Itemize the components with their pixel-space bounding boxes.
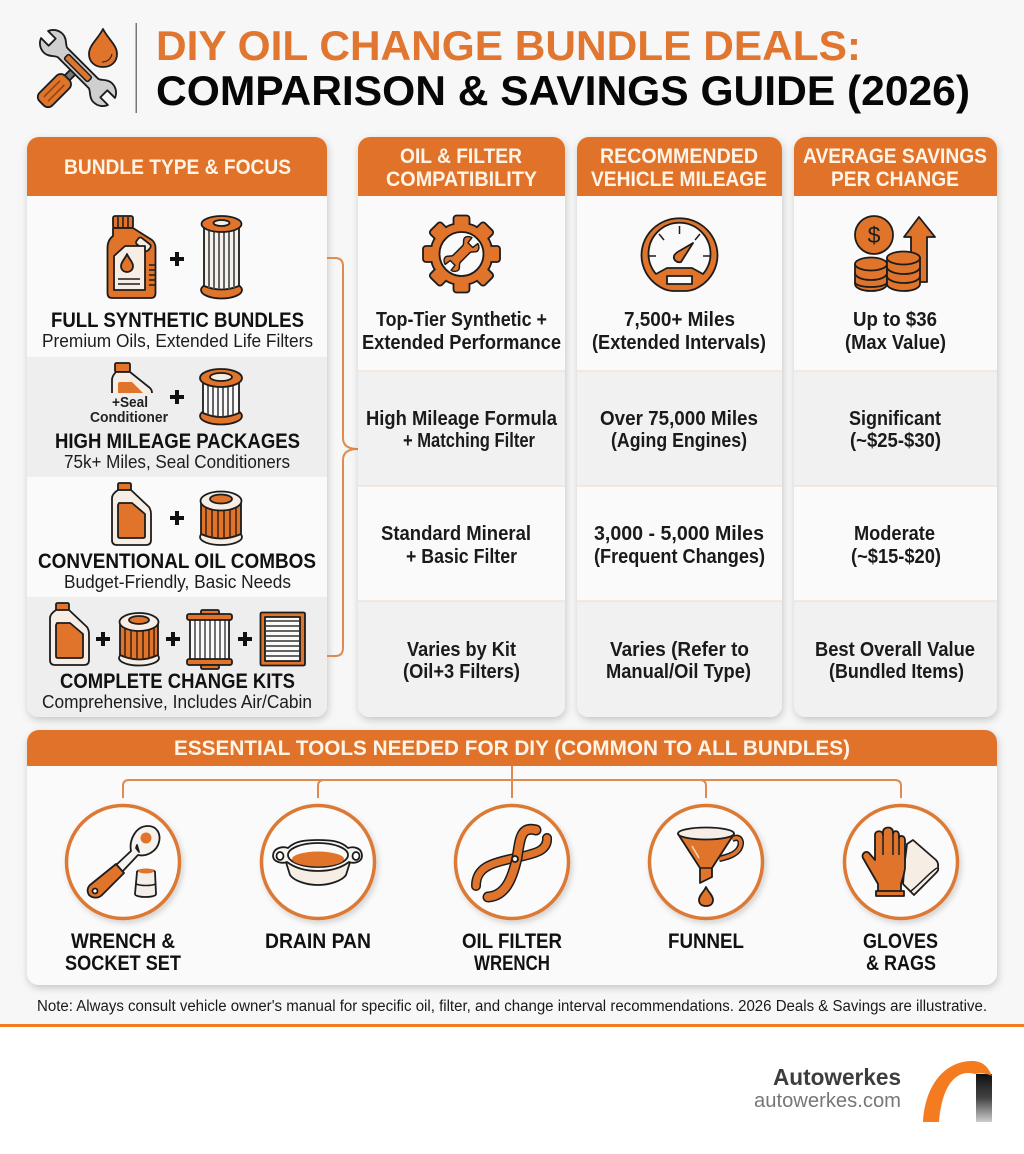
- bracket connector: [327, 258, 358, 656]
- tool: wrench and socket set: [66, 806, 180, 918]
- cell: full synthetic mileage: (Extended Intervals): [592, 331, 766, 354]
- cell: conventional mileage: (Frequent Changes): [594, 545, 765, 568]
- tool label: GLOVES: [863, 930, 938, 953]
- cell: full synthetic savings: [845, 308, 946, 354]
- cell: conventional compatibility: [381, 522, 531, 568]
- title: DIY OIL CHANGE BUNDLE DEALS:: [156, 22, 861, 69]
- icon: coins with rising arrow: [855, 216, 935, 291]
- panel: average savings per change: [794, 137, 997, 717]
- cell: kit compatibility: [403, 638, 520, 683]
- tool label: [462, 930, 562, 975]
- tool connector lines: [123, 766, 901, 798]
- bundle name: COMPLETE CHANGE KITS: [60, 670, 295, 693]
- bundle description: Premium Oils, Extended Life Filters: [42, 330, 313, 351]
- cell: kit savings: Best Overall Value: [815, 638, 975, 661]
- row: full synthetic bundles: [42, 216, 313, 351]
- seal conditioner label: +Seal: [112, 395, 148, 411]
- cell: kit mileage: [606, 638, 751, 683]
- cell: kit savings: (Bundled Items): [829, 660, 964, 683]
- cell: full synthetic compatibility: [362, 308, 561, 354]
- panel: essential tools: [27, 730, 997, 985]
- cell: kit compatibility: Varies by Kit: [407, 638, 516, 661]
- tool label: WRENCH &: [71, 930, 175, 953]
- cell: full synthetic compatibility: Top-Tier Synthetic +: [376, 308, 547, 331]
- cell: kit compatibility: (Oil+3 Filters): [403, 660, 520, 683]
- cell: conventional mileage: [594, 522, 765, 568]
- tool label: [863, 930, 938, 975]
- bundle name: CONVENTIONAL OIL COMBOS: [38, 550, 316, 573]
- icon: gear with wrench: [423, 216, 500, 292]
- icon: jug plus three filters: [50, 603, 305, 669]
- tool label: FUNNEL: [668, 930, 744, 953]
- cell: full synthetic savings: Up to $36: [853, 308, 937, 331]
- icon: conventional jug plus filter: [112, 483, 242, 545]
- cell: full synthetic mileage: [592, 308, 766, 354]
- tool label: & RAGS: [866, 952, 936, 975]
- panel header: COMPATIBILITY: [386, 168, 537, 191]
- cell: full synthetic mileage: 7,500+ Miles: [624, 308, 735, 331]
- panel header: [27, 730, 997, 766]
- panel header: [27, 137, 327, 196]
- panel header: AVERAGE SAVINGS: [803, 145, 987, 168]
- tool label: WRENCH: [474, 952, 550, 975]
- cell: full synthetic compatibility: Extended Performance: [362, 331, 561, 354]
- tool label: DRAIN PAN: [265, 930, 371, 953]
- row: high mileage packages: [27, 357, 327, 477]
- cell: high mileage savings: (~$25-$30): [850, 429, 941, 452]
- panel header: [358, 137, 565, 196]
- seal conditioner label: [90, 395, 168, 426]
- icon: crossed wrench and screwdriver with oil drop: [35, 25, 121, 111]
- icon: speedometer: [642, 218, 718, 291]
- seal conditioner label: Conditioner: [90, 410, 168, 426]
- panel: bundle type and focus: [27, 137, 327, 717]
- icon: synthetic oil jug plus tall filter: [108, 216, 242, 298]
- cell: high mileage savings: Significant: [849, 407, 941, 430]
- cell: conventional mileage: 3,000 - 5,000 Miles: [594, 522, 764, 545]
- cell: kit savings: [815, 638, 975, 683]
- panel header: [577, 137, 782, 196]
- cell: high mileage compatibility: High Mileage Formula: [366, 407, 558, 430]
- brand name: Autowerkes: [773, 1064, 901, 1090]
- bundle description: 75k+ Miles, Seal Conditioners: [64, 451, 290, 472]
- brand name: autowerkes.com: [754, 1090, 901, 1112]
- footnote: Note: Always consult vehicle owner's manual for specific oil, filter, and change interval recommendations. 2026 Deals & Savings are illustrative.: [37, 998, 987, 1015]
- footer band: [0, 1024, 1024, 1154]
- title: [156, 22, 970, 114]
- cell: high mileage mileage: Over 75,000 Miles: [600, 407, 758, 430]
- title: COMPARISON & SAVINGS GUIDE (2026): [156, 67, 970, 114]
- tool label: OIL FILTER: [462, 930, 562, 953]
- panel: recommended vehicle mileage: [577, 137, 782, 717]
- cell: conventional savings: Moderate: [854, 522, 935, 545]
- icon: coins with rising arrow: $: [868, 222, 881, 248]
- bundle name: FULL SYNTHETIC BUNDLES: [51, 309, 304, 332]
- tool: drain pan: [262, 806, 374, 918]
- panel header: RECOMMENDED: [600, 145, 758, 168]
- bundle description: Budget-Friendly, Basic Needs: [64, 571, 291, 592]
- cell: high mileage mileage: (Aging Engines): [611, 429, 747, 452]
- row: conventional oil combos: [38, 483, 316, 592]
- tool label: SOCKET SET: [65, 952, 181, 975]
- cell: high mileage savings: [849, 407, 941, 452]
- tool: gloves and rags: [844, 806, 958, 918]
- panel: oil and filter compatibility: [358, 137, 565, 717]
- row: complete change kits: [27, 597, 327, 717]
- tool: funnel: [650, 806, 762, 918]
- panel header: ESSENTIAL TOOLS NEEDED FOR DIY (COMMON TO ALL BUNDLES): [174, 737, 850, 760]
- cell: kit mileage: Varies (Refer to: [610, 638, 749, 661]
- cell: high mileage mileage: [600, 407, 758, 452]
- cell: conventional compatibility: Standard Mineral: [381, 522, 531, 545]
- cell: full synthetic savings: (Max Value): [845, 331, 946, 354]
- panel header: VEHICLE MILEAGE: [591, 168, 767, 191]
- cell: conventional compatibility: + Basic Filter: [406, 545, 517, 568]
- panel header: PER CHANGE: [831, 168, 959, 191]
- bundle description: Comprehensive, Includes Air/Cabin: [42, 691, 312, 712]
- panel header: [794, 137, 997, 196]
- cell: conventional savings: (~$15-$20): [851, 545, 941, 568]
- panel header: BUNDLE TYPE & FOCUS: [64, 156, 291, 179]
- cell: high mileage compatibility: [366, 407, 558, 452]
- cell: conventional savings: [851, 522, 941, 568]
- tool label: [65, 930, 181, 975]
- brand logo: [923, 1061, 992, 1122]
- panel header: OIL & FILTER: [400, 145, 522, 168]
- bundle name: HIGH MILEAGE PACKAGES: [55, 430, 300, 453]
- tool: oil filter wrench: [456, 806, 568, 918]
- cell: high mileage compatibility: + Matching Filter: [403, 429, 535, 452]
- cell: kit mileage: Manual/Oil Type): [606, 660, 751, 683]
- icon: high mileage jug plus filter: [112, 363, 242, 424]
- brand name: [754, 1064, 901, 1112]
